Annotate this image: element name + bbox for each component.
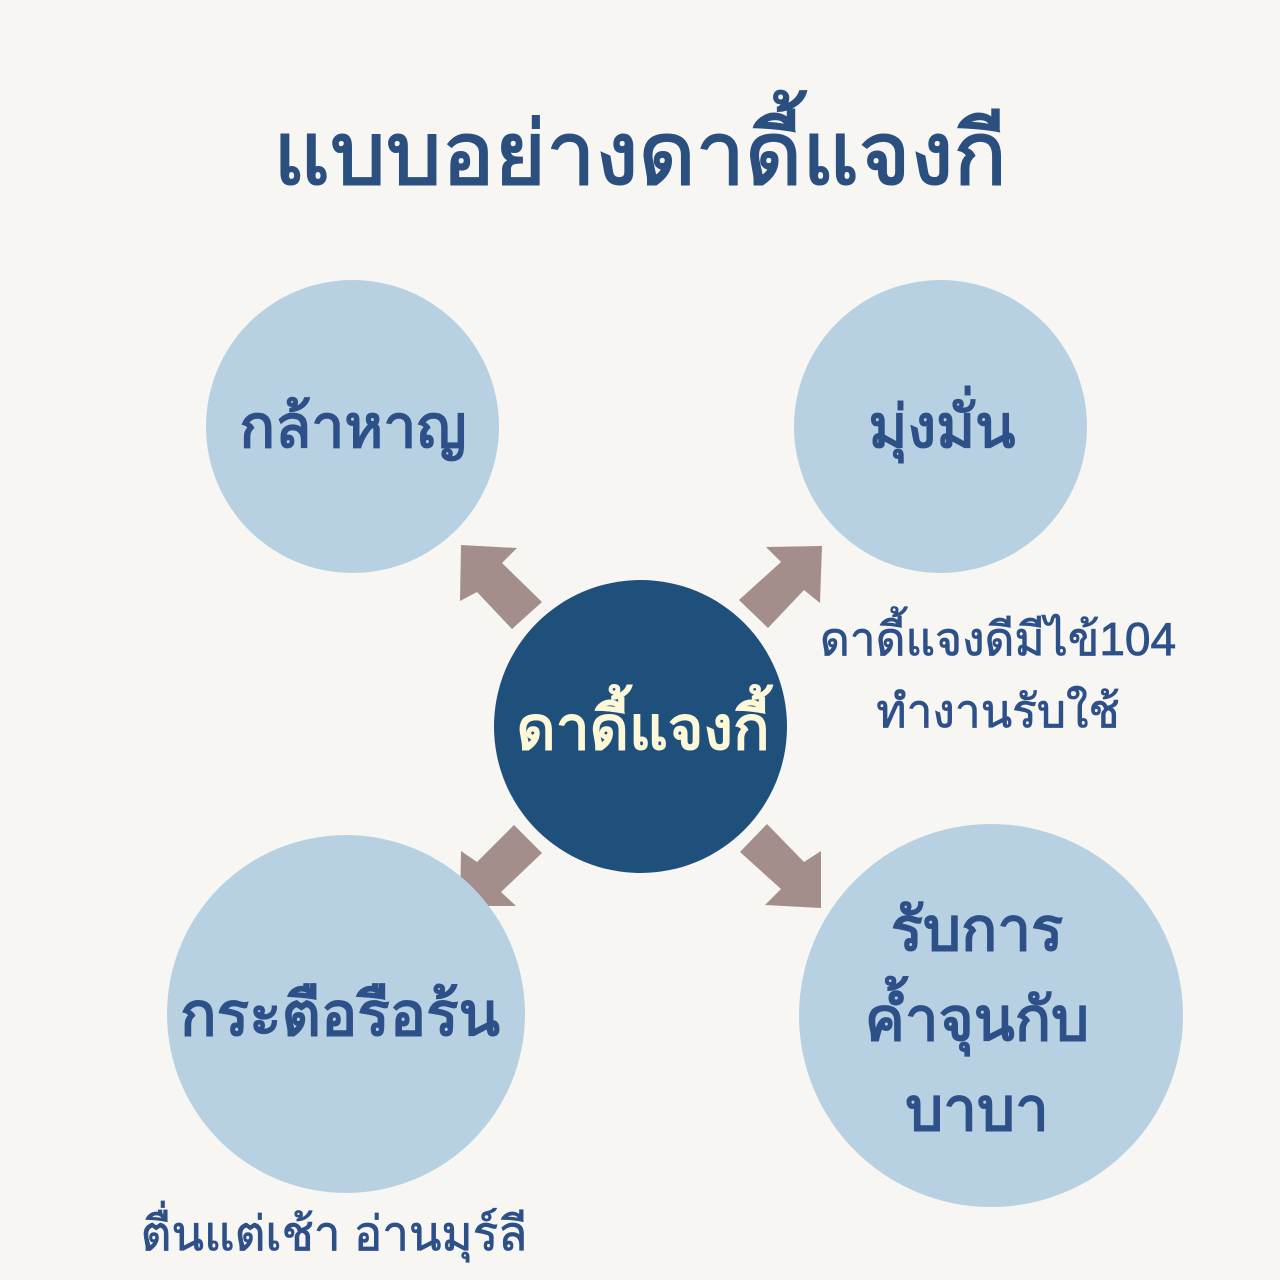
arrow: to top-left bbox=[460, 545, 542, 629]
circle: courage bbox=[206, 280, 499, 573]
note: fever bbox=[820, 606, 1176, 737]
label: enthusiastic: กระตือรือร้น bbox=[180, 980, 500, 1048]
label: determined: มุ่งมั่น bbox=[869, 394, 1015, 460]
label: receive love: รับการ bbox=[891, 896, 1063, 963]
note: fever: ดาดี้แจงดีมีไข้104 bbox=[820, 613, 1176, 665]
circle: enthusiastic bbox=[167, 835, 525, 1193]
note: morning: ตื่นแต่เช้า อ่านมุร์ลี bbox=[141, 1208, 527, 1261]
arrow: to bottom-right bbox=[740, 824, 821, 908]
label: courage: กล้าหาญ bbox=[239, 394, 467, 460]
label: receive love bbox=[865, 896, 1089, 1143]
arrow: to bottom-left bbox=[460, 825, 542, 906]
circle: receive love bbox=[799, 824, 1183, 1207]
label: receive love: บาบา bbox=[905, 1076, 1049, 1143]
label: center: ดาดี้แจงกี้ bbox=[516, 694, 770, 762]
circle: center bbox=[494, 580, 787, 873]
note: fever: ทำงานรับใช้ bbox=[876, 685, 1120, 737]
title: แบบอย่างดาดี้แจงกี bbox=[273, 104, 1007, 203]
circle: determined bbox=[794, 280, 1087, 573]
label: receive love: ค้ำจุนกับ bbox=[865, 986, 1089, 1053]
arrow: to top-right bbox=[739, 546, 822, 628]
